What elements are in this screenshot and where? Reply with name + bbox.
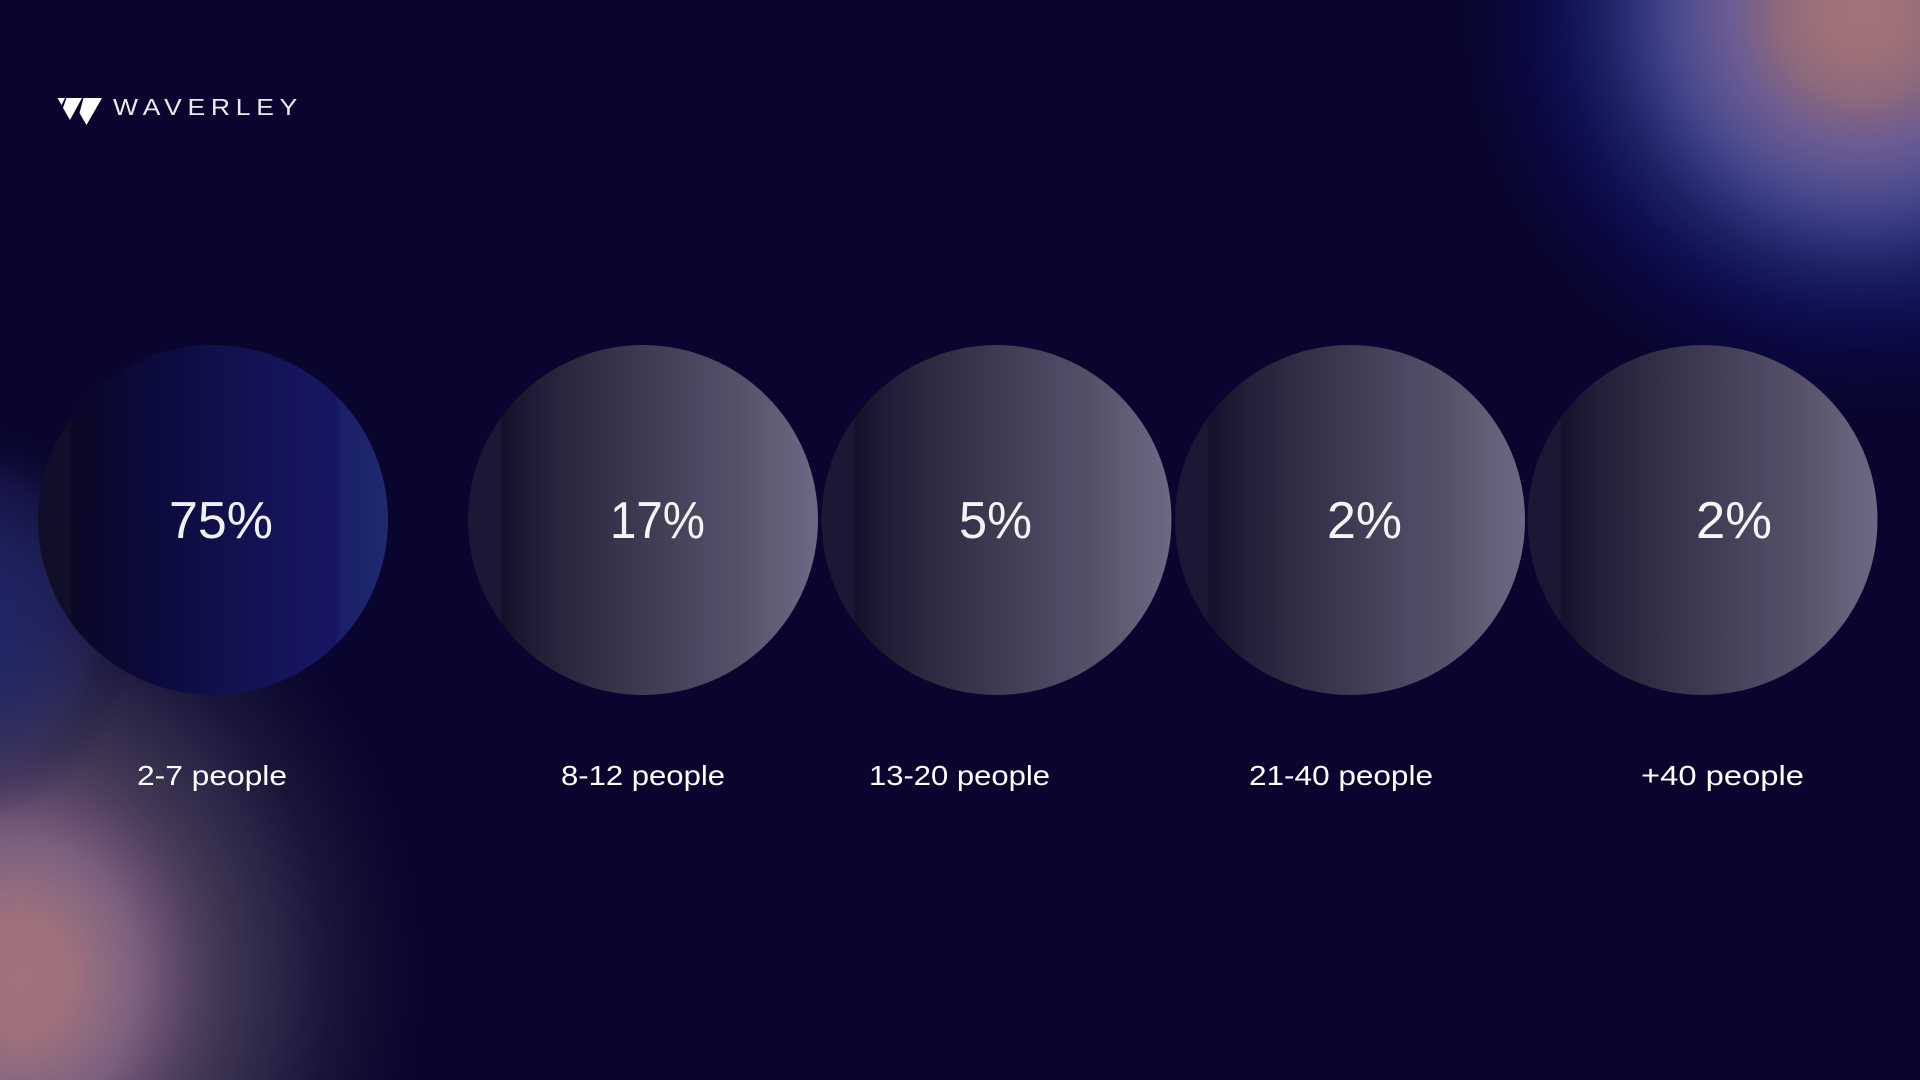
circle: 8-12 people [468,345,818,695]
circle: 2-7 people [38,345,388,695]
label: 21-40 people: 21-40 people [1249,760,1433,791]
logo mark [58,98,102,125]
circle: +40 people [1528,345,1878,695]
glow: top right [1460,0,1920,412]
label: 8-12 people: 8-12 people [561,760,725,791]
circle: 21-40 people: 2% [1327,492,1402,550]
logo [58,94,303,125]
label: 13-20 people: 13-20 people [869,760,1050,791]
circle: +40 people: 2% [1696,492,1772,550]
glow: bottom left [0,420,420,1080]
circle: 8-12 people: 17% [610,492,705,550]
label: +40 people: +40 people [1641,760,1804,791]
label: 2-7 people: 2-7 people [137,760,287,791]
circle: 13-20 people: 5% [959,492,1032,550]
circle: 13-20 people [822,345,1172,695]
circle: 21-40 people [1175,345,1525,695]
logo wordmark: WAVERLEY [113,94,303,120]
circle: 2-7 people: 75% [169,492,273,550]
